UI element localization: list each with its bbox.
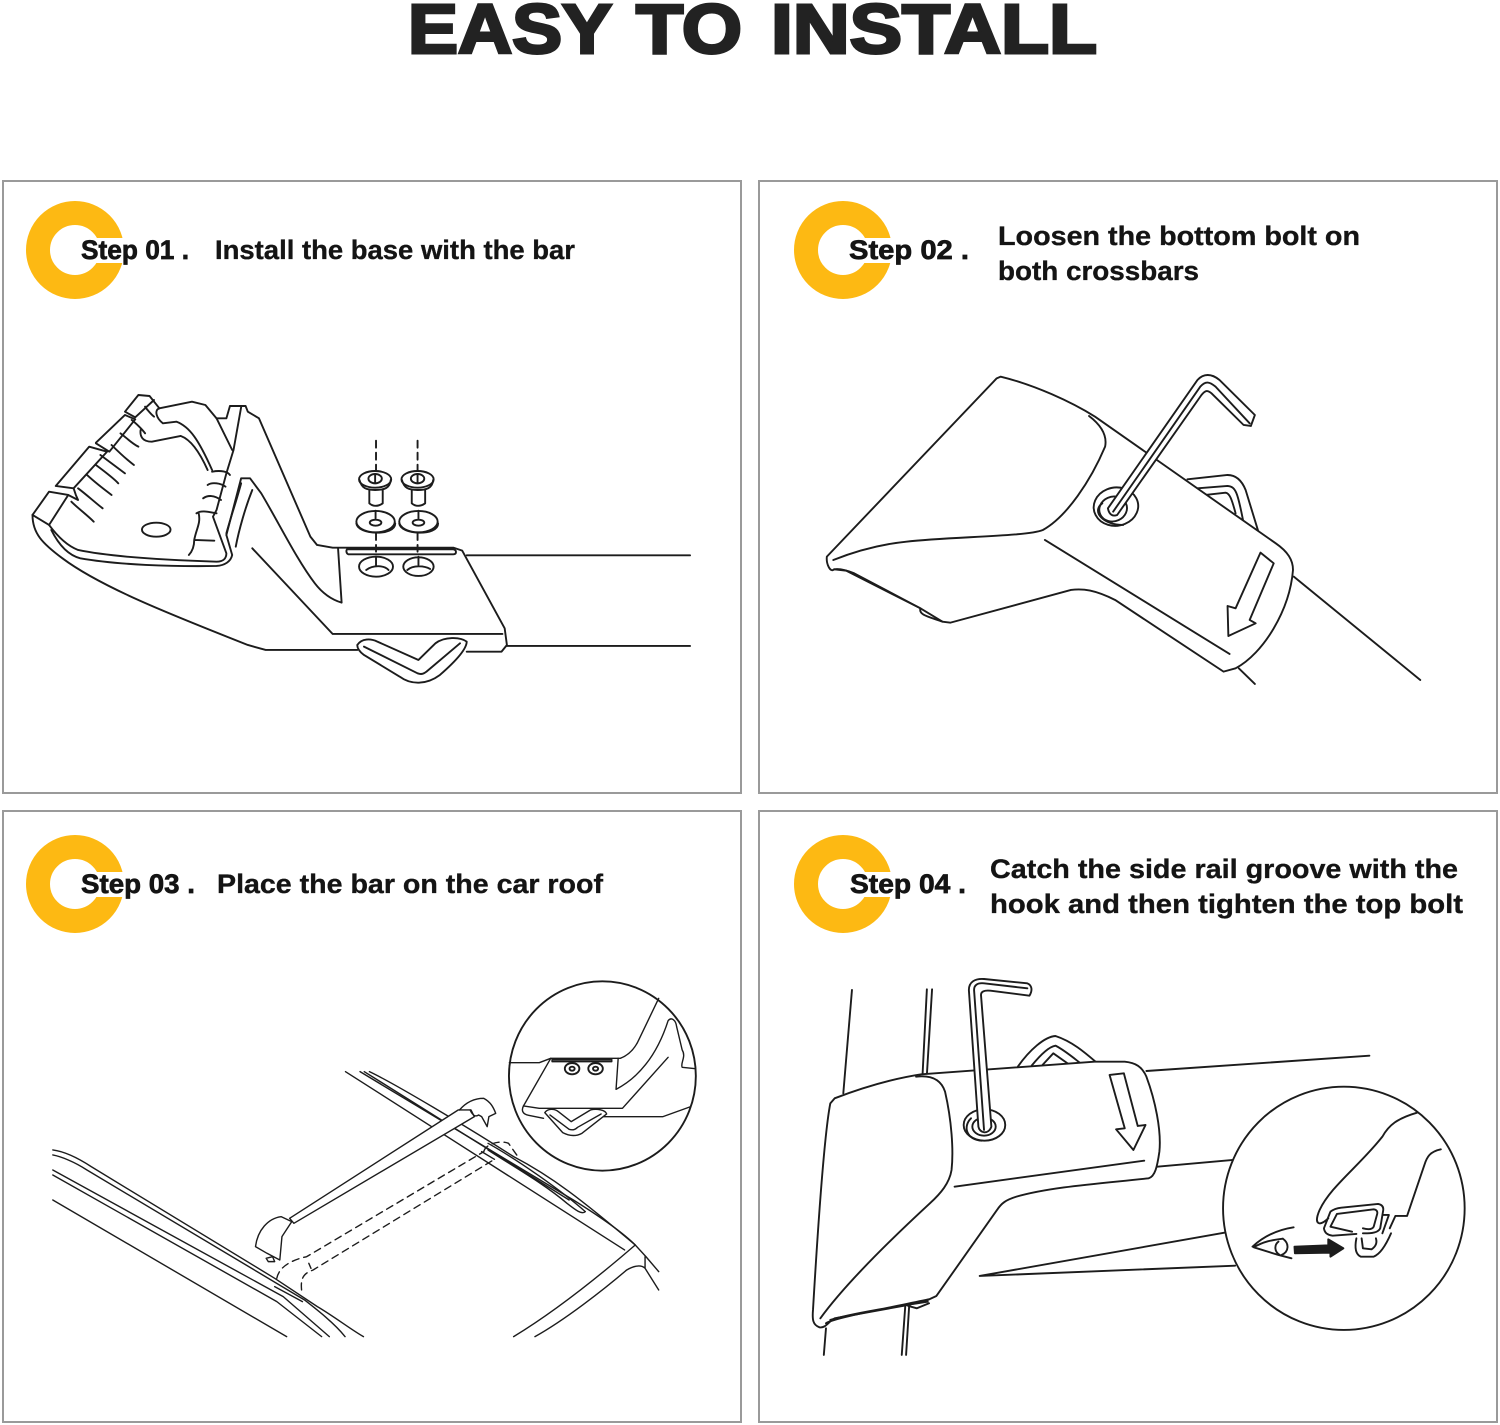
description: step 01: Install the base with the bar [215, 235, 575, 265]
crossbar rails [467, 555, 690, 646]
toothed strip [33, 395, 159, 515]
label: step 04: Step 04 . [850, 869, 966, 899]
left roof rail [53, 1150, 363, 1337]
crossbar base outline [827, 377, 1293, 672]
ribs [71, 407, 154, 522]
side rail groove [1356, 1233, 1391, 1257]
dashed footprint [277, 1142, 518, 1290]
crossbar [290, 1110, 474, 1223]
base outline [813, 1062, 1160, 1327]
front face edge [820, 1076, 952, 1318]
description: step 02: Loosen the bottom bolt on [998, 221, 1360, 251]
description: step 04: Catch the side rail groove with the [990, 854, 1458, 884]
inset hook [545, 1109, 607, 1136]
bolts [359, 471, 391, 488]
eye icon [1252, 1227, 1294, 1258]
slot plate [346, 549, 456, 554]
inner tray [49, 407, 241, 562]
hook behind [1018, 1036, 1097, 1067]
label: step 03: Step 03 . [81, 869, 195, 899]
badge: step 02 ring [806, 213, 894, 287]
rear windshield edge [514, 1245, 659, 1337]
front face edge [833, 416, 1106, 560]
mounting hole [142, 523, 171, 537]
illustration: base mounted on the bar with bolts and washers [33, 395, 690, 683]
arrow: line of sight [1294, 1239, 1343, 1257]
badge: step 04 ring [806, 847, 894, 921]
rail behind [1239, 577, 1420, 684]
inner bracket [140, 402, 232, 555]
bolt [1087, 482, 1145, 531]
illustration: hooking the side rail and tightening the top bolt [813, 979, 1465, 1355]
illustration: bar placed on the car roof [53, 981, 696, 1337]
right roof rail [346, 1072, 625, 1250]
label: step 01: Step 01 . [81, 235, 189, 265]
zoom inset [1223, 1087, 1465, 1330]
hook behind [1187, 475, 1259, 533]
description: step 02: both crossbars [998, 256, 1199, 286]
zoom inset [509, 981, 696, 1171]
description: step 03: Place the bar on the car roof [217, 869, 604, 899]
panel: step 01 [3, 181, 741, 793]
illustration: loosening the bolt with a hex key [827, 375, 1420, 684]
label: step 02: Step 02 . [849, 235, 969, 265]
rail hook [1324, 1204, 1383, 1236]
panel: step 04 [759, 811, 1497, 1422]
badge: step 01 ring [38, 213, 126, 287]
bolt holes [359, 557, 393, 577]
description: step 04: hook and then tighten the top bolt [990, 889, 1463, 919]
direction arrow [1228, 553, 1274, 636]
title [408, 0, 1097, 68]
bolt [964, 1109, 1005, 1141]
panel: step 02 [759, 181, 1497, 793]
hook [357, 638, 467, 683]
direction arrow [1110, 1073, 1146, 1150]
description: step 04 [990, 854, 1463, 919]
dashed guide lines [376, 441, 418, 470]
base outer shell [217, 406, 507, 652]
washers [356, 511, 395, 532]
hex key [969, 979, 1031, 1132]
description: step 02 [998, 221, 1360, 286]
hex key [1108, 375, 1255, 516]
badge: step 03 ring [38, 847, 126, 921]
rails [843, 989, 1369, 1276]
panel: step 03 [3, 811, 741, 1422]
